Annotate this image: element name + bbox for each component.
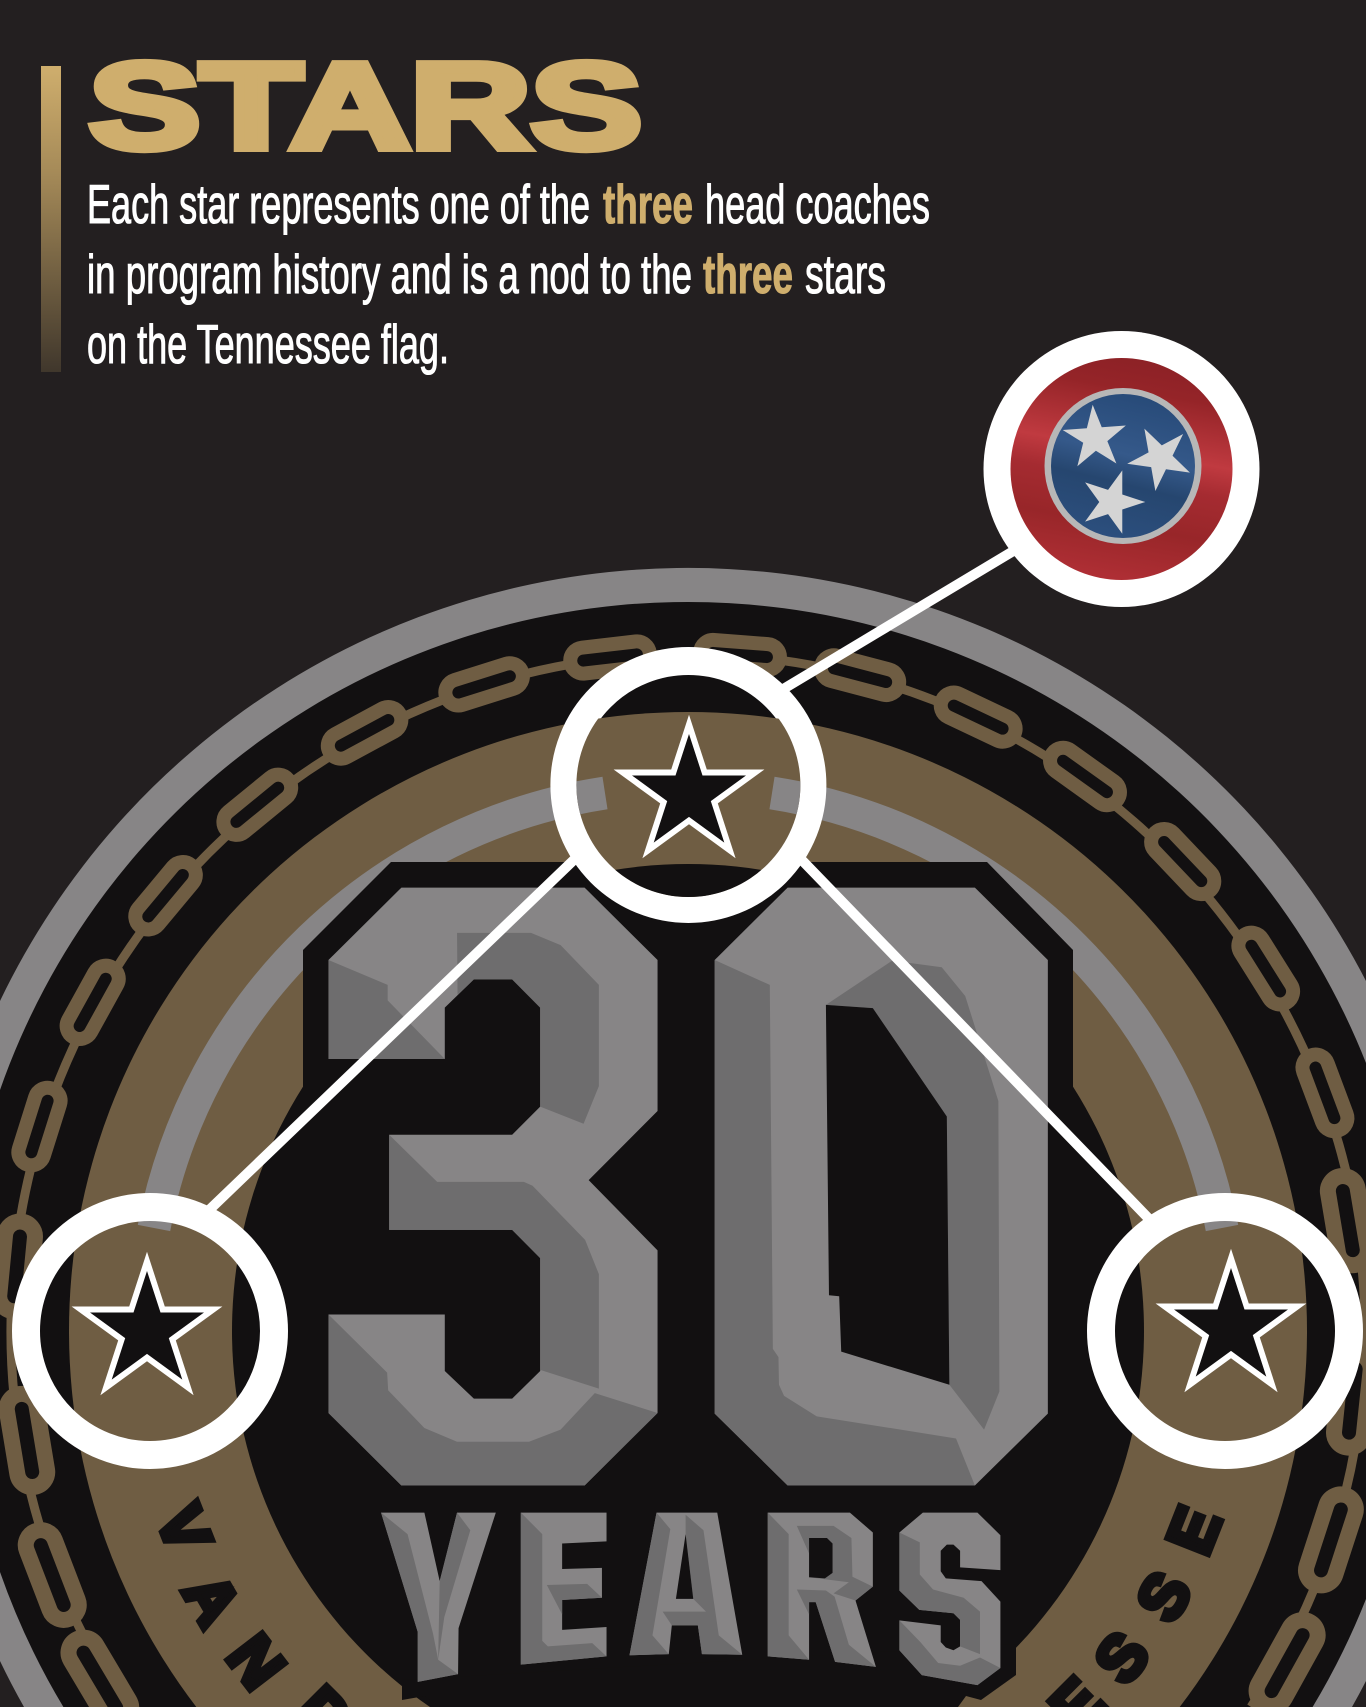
description text: in program history and is a nod to the [87,243,692,305]
ring lettering [143,1495,1235,1707]
letter S [899,1513,1000,1685]
black chain band [0,602,1366,1707]
gold ring [69,712,1307,1707]
star icon [72,1252,222,1395]
emblem: 30 years badge [0,568,1366,1707]
title: STARS [89,38,642,174]
callout: left star [26,1207,274,1455]
black base behind years [402,1644,1016,1707]
inner black disk [232,875,1144,1707]
callout: top star [550,647,826,923]
connector lines [205,544,1153,1223]
description text: head coaches [705,173,930,235]
letter R [768,1513,876,1667]
letter E [521,1513,607,1665]
letter Y [381,1513,496,1682]
numeral 3 [328,888,658,1485]
star icon [614,715,764,858]
description text: three [703,243,793,305]
letter A [629,1513,742,1655]
ring lettering: S [1080,1619,1163,1696]
callout: tennessee flag [984,331,1260,607]
outer gray ring [0,568,1366,1707]
accent bar [41,66,61,372]
flag stars [1062,404,1190,534]
callout: right star [1101,1207,1349,1455]
description text [87,173,930,375]
ring lettering: N [214,1621,299,1702]
ring lettering: A [169,1561,255,1638]
description text: on the Tennessee flag. [87,313,449,375]
ring lettering: V [143,1495,225,1562]
black shield behind numerals [303,862,1073,1090]
description text: Each star represents one of the [87,173,590,235]
star icon [1156,1249,1306,1392]
numeral 0 [715,888,1048,1485]
chain [0,639,1366,1707]
inner gray arcs [154,793,1222,1228]
ring lettering: E [1153,1497,1235,1563]
numerals and years lettering [328,888,1048,1685]
description text: stars [805,243,886,305]
description text: three [603,173,693,235]
ring lettering: S [1122,1560,1206,1633]
